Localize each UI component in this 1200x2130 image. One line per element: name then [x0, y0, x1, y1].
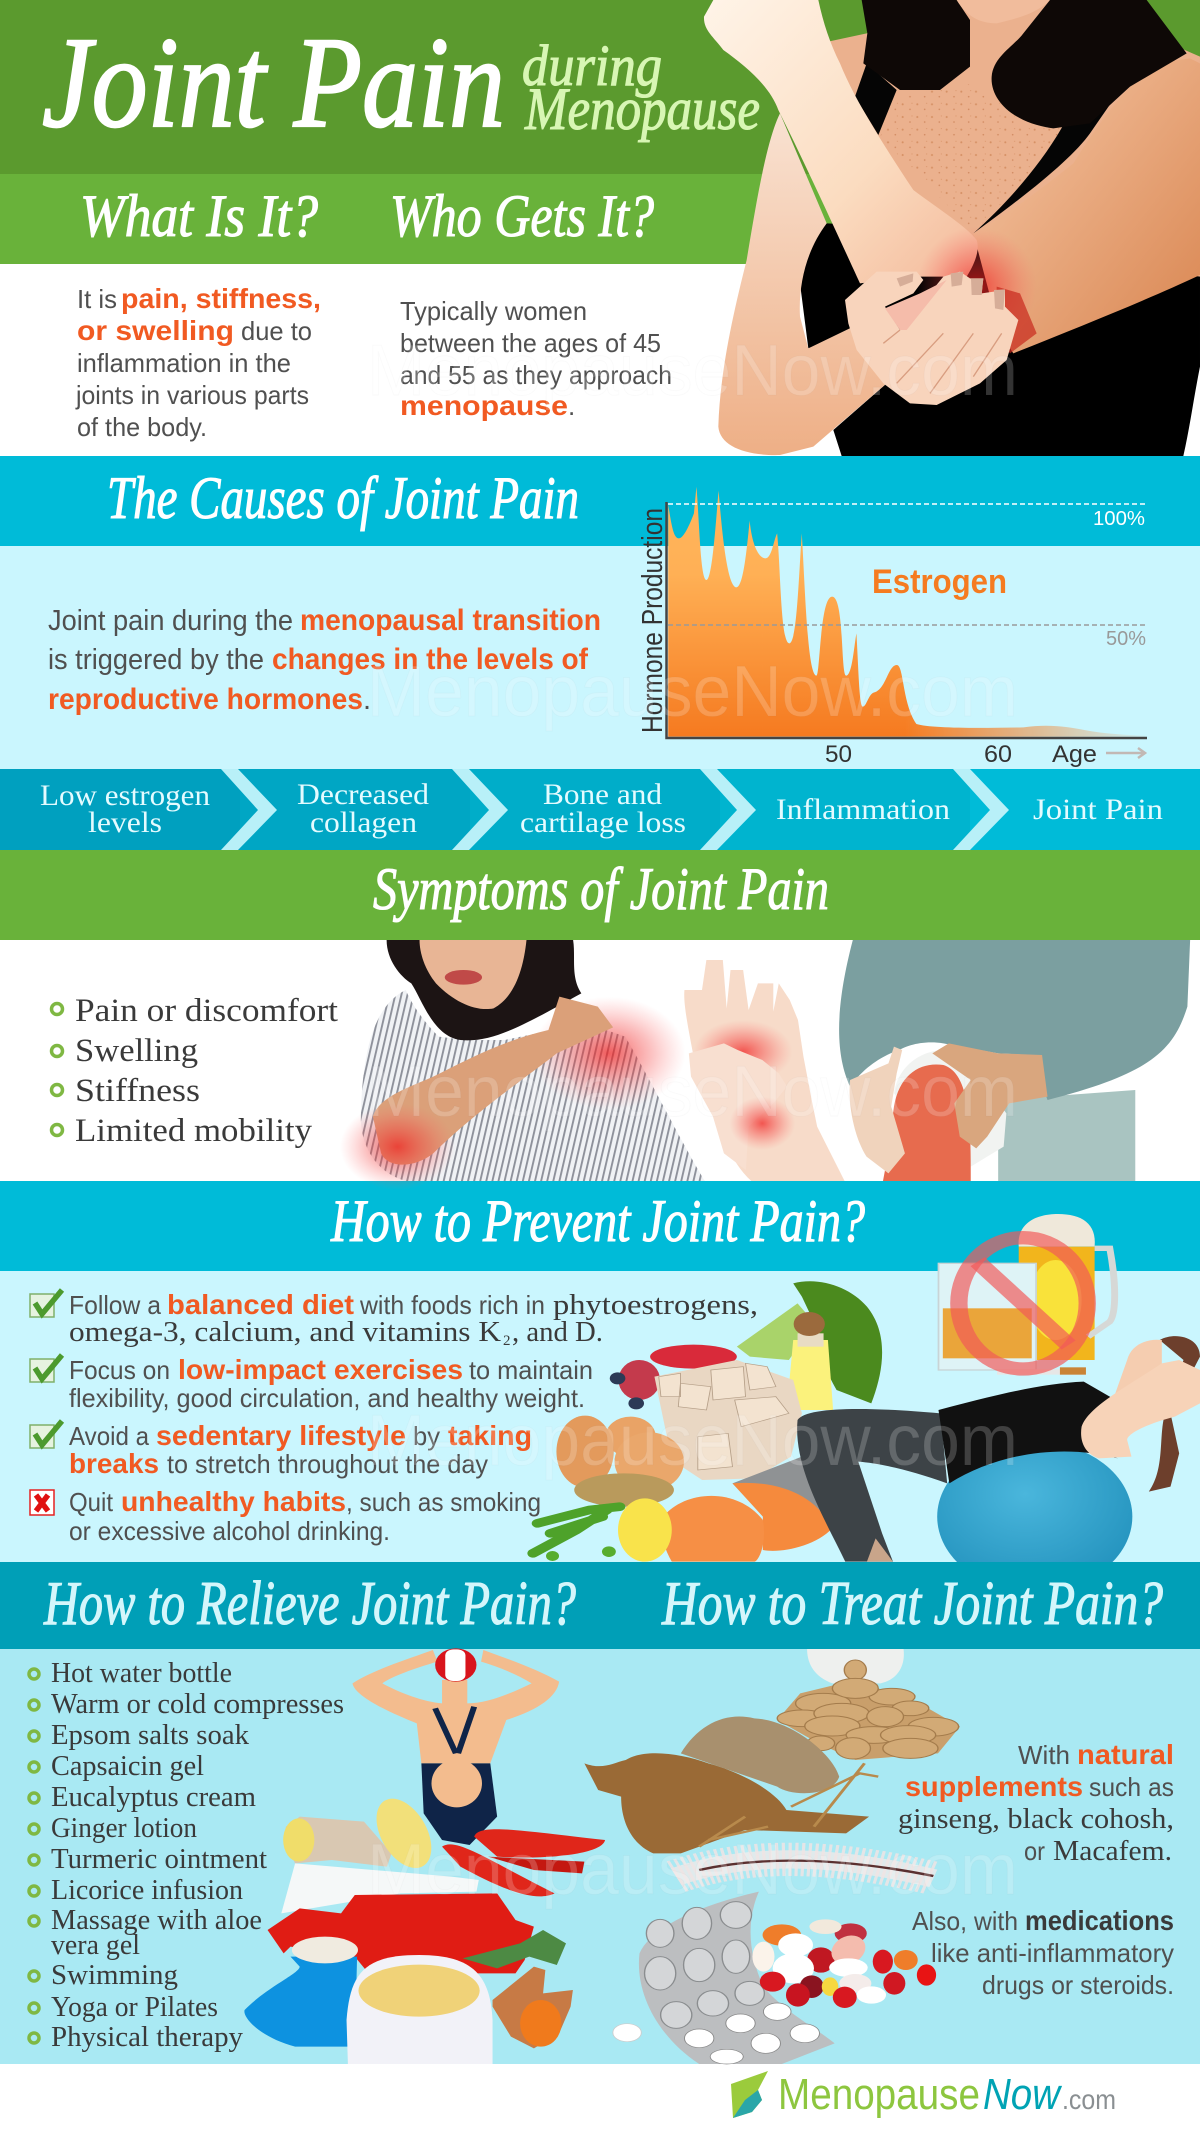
illustration: eucalyptus leaves	[463, 1930, 566, 1968]
heading: symptoms: Symptoms of Joint Pain	[373, 856, 829, 922]
panel: what and who heading band	[0, 174, 1200, 264]
illustration: broccoli and oil	[737, 1281, 882, 1410]
step: decreased collagen	[297, 778, 429, 839]
text block: causes: changes in the levels of	[272, 643, 589, 676]
illustration: turmeric	[493, 1967, 573, 2048]
tip: sedentary lifestyle: to stretch throughout the day	[167, 1449, 488, 1479]
photo: woman holding elbow	[704, 0, 1200, 456]
text block: who gets it: Typically women	[400, 296, 587, 326]
text block: who gets it: .	[568, 391, 575, 421]
icon: loose tablet	[613, 2024, 641, 2042]
heading: prevent: How to Prevent Joint Pain?	[330, 1188, 865, 1254]
heading: relieve: How to Relieve Joint Pain?	[43, 1570, 576, 1638]
tip: balanced diet: , and D.	[512, 1316, 603, 1348]
step: joint pain: Joint Pain	[1033, 793, 1163, 826]
list: relief options: Ginger lotion	[51, 1812, 197, 1844]
text block: causes: menopausal transition	[300, 604, 601, 637]
text block: what is it: joints in various parts	[75, 380, 309, 410]
tip: low-impact exercises	[69, 1354, 593, 1413]
panel: causes heading band	[0, 456, 1200, 546]
panel: relieve and treat heading band	[0, 1562, 1200, 1649]
tip: low-impact exercises: to maintain	[469, 1355, 593, 1385]
list: symptoms: Swelling	[75, 1033, 198, 1069]
panel: prevent heading band	[0, 1181, 1200, 1271]
tick: 50: 50	[825, 741, 852, 768]
step: bone and cartilage loss: Bone and	[543, 778, 662, 811]
step: low estrogen levels	[40, 779, 210, 839]
illustration: ice bag	[244, 1937, 358, 2047]
watermark: MenopauseNow.com	[367, 331, 1018, 1910]
icon: logo silhouette	[731, 2071, 768, 2118]
tip: unhealthy habits: Quit	[69, 1487, 114, 1517]
subtitle: Menopause: Menopause	[524, 76, 760, 142]
panel: causes body background	[0, 546, 1200, 769]
tip: sedentary lifestyle	[69, 1420, 532, 1479]
illustration: relief remedies	[244, 1648, 605, 2064]
illustration: woman exercising on ball	[797, 1336, 1200, 1562]
tip: balanced diet: omega-3, calcium, and vitamins K	[69, 1316, 501, 1348]
text block: natural supplements: ginseng, black cohosh,	[898, 1803, 1174, 1835]
list: relief options: Swimming	[51, 1959, 178, 1991]
tip: balanced diet	[69, 1289, 758, 1349]
list: relief options: Eucalyptus cream	[51, 1781, 256, 1813]
illustration: bowl of tofu	[654, 1360, 802, 1480]
tip: balanced diet: Follow a	[69, 1290, 162, 1320]
tip: sedentary lifestyle: by	[413, 1421, 440, 1451]
step: low estrogen levels: levels	[88, 806, 162, 839]
list: relief options: Yoga or Pilates	[51, 1991, 218, 2023]
step: decreased collagen: Decreased	[297, 778, 429, 811]
panel: intro white background	[0, 264, 1200, 456]
illustration: ginseng root	[584, 1753, 878, 1853]
arrow: age direction	[1106, 748, 1145, 758]
series label: Estrogen: Estrogen	[872, 563, 1007, 601]
list: prevention tips	[30, 1289, 758, 1546]
text block: natural supplements: such as	[1089, 1772, 1174, 1802]
panel: relieve and treat body background	[0, 1649, 1200, 2064]
tick: 60: 60	[984, 741, 1012, 768]
step: inflammation: Inflammation	[776, 793, 950, 826]
list: relief options: Massage with aloe	[51, 1904, 262, 1936]
text block: causes: .	[363, 684, 371, 716]
text block: natural supplements: supplements	[905, 1771, 1083, 1802]
icon: green check	[30, 1355, 62, 1382]
illustration: foods and exercise	[533, 1214, 1200, 1592]
text block: who gets it	[400, 296, 672, 421]
step: low estrogen levels: Low estrogen	[40, 779, 210, 812]
text block: medications: drugs or steroids.	[982, 1970, 1174, 2000]
list: relief options: Hot water bottle	[51, 1657, 232, 1689]
heading: What Is It: What Is It?	[80, 183, 318, 249]
list: symptoms: Limited mobility	[75, 1113, 313, 1149]
list: symptoms: Stiffness	[75, 1073, 200, 1109]
illustration: berries	[610, 1345, 737, 1409]
photo: woman with shoulder and elbow pain	[340, 940, 705, 1190]
text block: medications: medications	[1025, 1905, 1174, 1936]
text block: what is it: inflammation in the	[77, 348, 291, 378]
list: relief options: Warm or cold compresses	[51, 1688, 344, 1720]
illustration: ginger	[283, 1794, 442, 1873]
title: Joint Pain: Joint Pain	[42, 11, 505, 155]
list: symptoms	[52, 993, 338, 1149]
tip: balanced diet: phytoestrogens,	[553, 1289, 758, 1321]
list: relief options: Physical therapy	[51, 2021, 243, 2053]
subtitle: during: during	[522, 33, 662, 98]
tip: balanced diet: 2	[503, 1333, 510, 1349]
illustration: red peppers	[442, 1829, 605, 1896]
list: relief options: Epsom salts soak	[51, 1719, 249, 1751]
list: symptoms: Pain or discomfort	[75, 993, 338, 1029]
panel: symptoms heading band	[0, 850, 1200, 940]
watermark: MenopauseNow.com: MenopauseNow.com	[367, 1401, 1018, 1481]
text block: what is it	[75, 283, 321, 442]
heading: causes: The Causes of Joint Pain	[107, 465, 579, 531]
panel: header background	[0, 0, 1200, 174]
illustration: spilled supplement bottle and tablets	[777, 1649, 960, 1760]
text block: who gets it: menopause	[400, 390, 568, 421]
text block: causes: is triggered by the	[48, 644, 264, 676]
list: relief options: Licorice infusion	[51, 1874, 243, 1906]
watermark: MenopauseNow.com: MenopauseNow.com	[367, 652, 1018, 732]
title	[42, 11, 760, 155]
text block: natural supplements: With	[1018, 1740, 1070, 1770]
step: bone and cartilage loss: cartilage loss	[520, 806, 686, 839]
label: 100 percent: 100%	[1093, 508, 1145, 530]
logo text: Menopause: Menopause	[778, 2070, 980, 2119]
illustration: salmon and lemon	[618, 1457, 832, 1562]
chart area: estrogen curve	[668, 487, 1145, 737]
text block: who gets it: and 55 as they approach	[400, 360, 672, 390]
tip: unhealthy habits: or excessive alcohol drinking.	[69, 1516, 390, 1546]
text block: what is it: pain, stiffness,	[121, 283, 321, 314]
panel: symptoms white background	[0, 940, 1200, 1181]
process flow: causes chain	[0, 769, 1200, 850]
text block: natural supplements: or	[1024, 1836, 1045, 1866]
text block: what is it: of the body.	[77, 412, 207, 442]
text block: what is it: or swelling	[77, 315, 234, 346]
icon: green check	[30, 1421, 62, 1448]
tip: sedentary lifestyle: taking	[448, 1420, 532, 1451]
text block: natural supplements: natural	[1077, 1739, 1174, 1770]
list: relief options	[29, 1657, 344, 2053]
illustration: ointment tube	[281, 1863, 479, 1913]
watermark: MenopauseNow.com: MenopauseNow.com	[367, 1052, 1018, 1132]
illustration: supplements and medications	[584, 1649, 960, 2064]
photo: hand with wrist pain	[684, 960, 845, 1181]
text block: medications: like anti-inflammatory	[931, 1938, 1174, 1968]
text block: causes	[48, 604, 601, 716]
tip: unhealthy habits: unhealthy habits	[121, 1486, 346, 1517]
illustration: beans and peas	[533, 1473, 674, 1561]
tip: balanced diet: balanced diet	[167, 1289, 354, 1320]
logo: MenopauseNow.com	[731, 2070, 1116, 2119]
list: relief options: Capsaicin gel	[51, 1750, 204, 1782]
list: relief options: vera gel	[51, 1929, 140, 1961]
icon: red cross	[30, 1490, 54, 1515]
text block: medications: Also, with	[912, 1906, 1018, 1936]
logo text: .com: .com	[1062, 2084, 1116, 2115]
text block: causes: Joint pain during the	[48, 605, 293, 637]
axis label: Age: Age	[1052, 741, 1097, 768]
illustration: blister pack	[639, 1892, 835, 2064]
heading: Who Gets It: Who Gets It?	[390, 183, 654, 249]
tip: balanced diet: with foods rich in	[359, 1290, 545, 1320]
step: bone and cartilage loss	[520, 778, 686, 839]
chart axes	[666, 502, 1147, 738]
tip: low-impact exercises: flexibility, good circulation, and healthy weight.	[69, 1383, 585, 1413]
tip: unhealthy habits	[69, 1486, 541, 1546]
illustration: cream jar	[347, 1955, 493, 2064]
illustration: colorful pills	[752, 1919, 936, 2008]
tip: low-impact exercises: Focus on	[69, 1355, 170, 1385]
logo text: Now: Now	[983, 2070, 1063, 2119]
list: relief options: Turmeric ointment	[51, 1843, 267, 1875]
illustration: swimmer	[352, 1648, 559, 1845]
photo: woman with knee pain	[839, 940, 1190, 1181]
tip: sedentary lifestyle: sedentary lifestyle	[156, 1420, 406, 1451]
watermark: MenopauseNow.com: MenopauseNow.com	[367, 1830, 1018, 1910]
text block: what is it: due to	[241, 316, 312, 346]
text block: causes: reproductive hormones	[48, 683, 363, 716]
tip: unhealthy habits: , such as smoking	[346, 1487, 541, 1517]
tip: sedentary lifestyle: breaks	[69, 1448, 159, 1479]
icon: whiskey and beer with prohibition sign	[938, 1214, 1115, 1375]
tip: low-impact exercises: low-impact exercises	[178, 1354, 463, 1385]
text block: who gets it: between the ages of 45	[400, 328, 661, 358]
chart: estrogen production over age	[637, 487, 1147, 768]
text block: natural supplements	[898, 1739, 1174, 1867]
watermark: MenopauseNow.com: MenopauseNow.com	[367, 331, 1018, 411]
icon: green check	[30, 1290, 62, 1317]
y axis label: Hormone Production	[637, 508, 669, 733]
text block: what is it: It is	[77, 284, 117, 314]
illustration: black cohosh flower	[676, 1859, 933, 1878]
tip: sedentary lifestyle: Avoid a	[69, 1421, 149, 1451]
text block: natural supplements: Macafem.	[1053, 1835, 1172, 1867]
illustration: dried root pile	[681, 1717, 839, 1793]
illustration: hot water bottle	[268, 1893, 534, 1973]
step: decreased collagen: collagen	[310, 806, 417, 839]
illustration: eggs	[556, 1416, 684, 1491]
panel: prevent body background	[0, 1271, 1200, 1562]
label: 50 percent: 50%	[1106, 628, 1146, 650]
text block: medications	[912, 1905, 1174, 2000]
